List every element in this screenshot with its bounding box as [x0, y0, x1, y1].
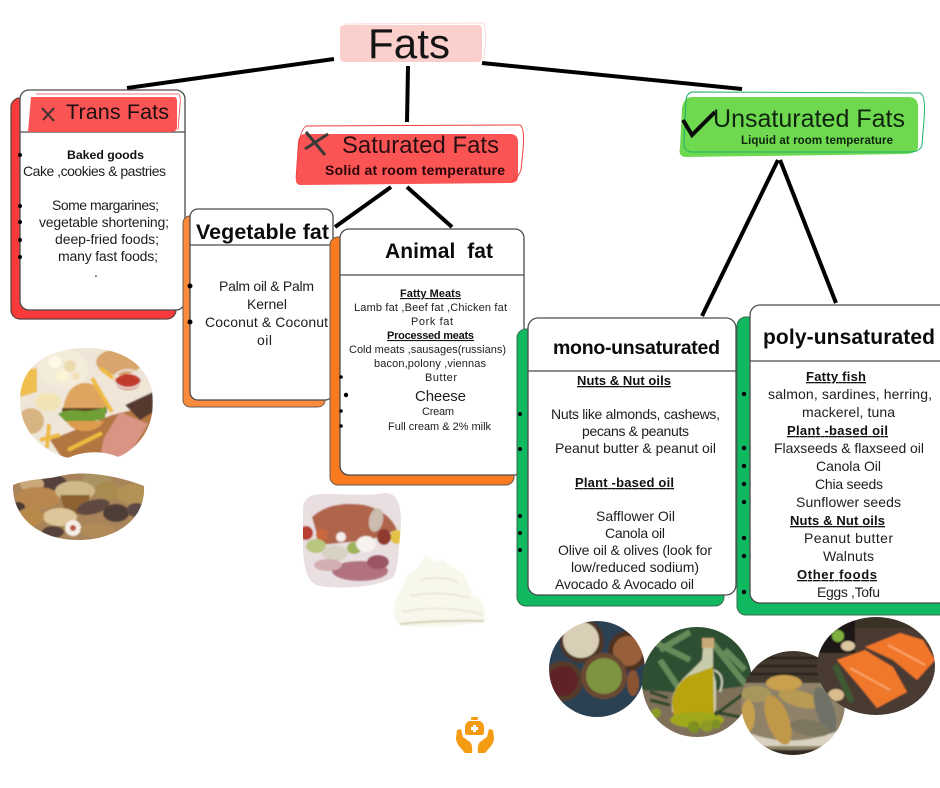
trans fats list: many fast foods;: [58, 248, 158, 264]
animal fat list: Cheese: [415, 388, 466, 405]
poly-unsaturated list: Walnuts: [823, 548, 874, 564]
trans fats list: Baked goods: [67, 148, 144, 162]
panel: saturated fats heading: [296, 125, 524, 185]
animal fat list: Cream: [422, 406, 454, 418]
image: olive oil: [640, 625, 754, 740]
trans fats list: vegetable shortening;: [39, 214, 169, 230]
vegetable fat list: [188, 278, 328, 348]
mono-unsaturated list: low/reduced sodium): [571, 559, 699, 575]
animal fat list: Processed meats: [387, 330, 474, 342]
animal fat list: Lamb fat ,Beef fat ,Chicken fat: [354, 302, 507, 314]
mono-unsaturated list: Avocado & Avocado oil: [555, 576, 694, 592]
trans fats list: Cake ,cookies & pastries: [23, 163, 166, 179]
icon: hands holding bottle: [456, 717, 494, 753]
title: Fats: [340, 20, 486, 67]
connector lines: [127, 59, 836, 316]
poly-unsaturated list: Flaxseeds & flaxseed oil: [774, 440, 924, 456]
image: baked goods: [13, 474, 144, 540]
poly-unsaturated list: Plant -based oil: [787, 423, 888, 438]
animal fat list: Fatty Meats: [400, 288, 461, 300]
trans fats list: deep-fried foods;: [55, 231, 159, 247]
mono-unsaturated list: Safflower Oil: [596, 508, 675, 524]
poly-unsaturated list: Canola Oil: [816, 458, 881, 474]
panel: saturated fats heading: Saturated Fats: [342, 132, 499, 159]
poly-unsaturated list: Other foods: [797, 567, 877, 582]
image: nuts bowls: [549, 621, 645, 717]
vegetable fat list: Kernel: [247, 296, 287, 312]
mono-unsaturated list: pecans & peanuts: [582, 423, 689, 439]
heading: poly-unsaturated: poly-unsaturated: [763, 326, 935, 349]
animal fat list: bacon,polony ,viennas: [374, 358, 486, 370]
mono-unsaturated list: Canola oil: [605, 525, 665, 541]
mono-unsaturated list: [518, 373, 720, 592]
heading: vegetable fat: Vegetable fat: [196, 220, 329, 244]
heading: trans fats: Trans Fats: [66, 100, 169, 124]
panel: saturated fats heading: Solid at room temperature: [325, 162, 505, 178]
panel: trans fats: [11, 90, 185, 319]
heading: trans fats: [28, 94, 180, 132]
panel: vegetable fat: [183, 209, 333, 407]
poly-unsaturated list: Sunflower seeds: [796, 494, 901, 510]
mono-unsaturated list: Nuts & Nut oils: [577, 373, 671, 388]
image: cold meats: [303, 493, 401, 588]
poly-unsaturated list: [742, 369, 932, 600]
image: salmon: [815, 612, 937, 717]
mono-unsaturated list: Peanut butter & peanut oil: [555, 440, 716, 456]
poly-unsaturated list: mackerel, tuna: [802, 404, 895, 420]
poly-unsaturated list: Fatty fish: [806, 369, 866, 384]
vegetable fat list: Coconut & Coconut: [205, 314, 328, 330]
panel: poly-unsaturated: [737, 305, 940, 615]
heading: mono-unsaturated: mono-unsaturated: [553, 337, 720, 359]
image: fast food: [20, 348, 153, 458]
poly-unsaturated list: salmon, sardines, herring,: [768, 386, 932, 402]
vegetable fat list: Palm oil & Palm: [219, 278, 314, 294]
animal fat list: Full cream & 2% milk: [388, 421, 492, 433]
animal fat list: Butter: [425, 372, 457, 384]
image: whipped cream: [394, 555, 485, 627]
trans fats list: Some margarines;: [52, 197, 159, 213]
poly-unsaturated list: Eggs ,Tofu: [817, 584, 880, 600]
panel: unsaturated fats heading: Unsaturated Fats: [713, 105, 905, 133]
mono-unsaturated list: Olive oil & olives (look for: [558, 542, 712, 558]
mono-unsaturated list: Plant -based oil: [575, 475, 674, 490]
heading: animal fat: Animal fat: [385, 240, 493, 263]
mono-unsaturated list: Nuts like almonds, cashews,: [551, 406, 720, 422]
trans fats list: .: [94, 264, 98, 280]
vegetable fat list: oil: [257, 332, 272, 348]
animal fat list: Pork fat: [411, 316, 453, 328]
poly-unsaturated list: Chia seeds: [815, 476, 883, 492]
title: Fats: Fats: [368, 20, 450, 67]
animal fat list: Cold meats ,sausages(russians): [349, 344, 506, 356]
trans fats list: [18, 148, 169, 280]
poly-unsaturated list: Nuts & Nut oils: [790, 513, 885, 528]
panel: mono-unsaturated: [517, 318, 736, 606]
animal fat list: [339, 288, 507, 433]
panel: animal fat: [330, 229, 524, 485]
poly-unsaturated list: Peanut butter: [804, 530, 893, 546]
panel: unsaturated fats heading: Liquid at room temperature: [741, 135, 893, 147]
image: fried sardines: [740, 650, 848, 760]
panel: unsaturated fats heading: [680, 92, 924, 157]
